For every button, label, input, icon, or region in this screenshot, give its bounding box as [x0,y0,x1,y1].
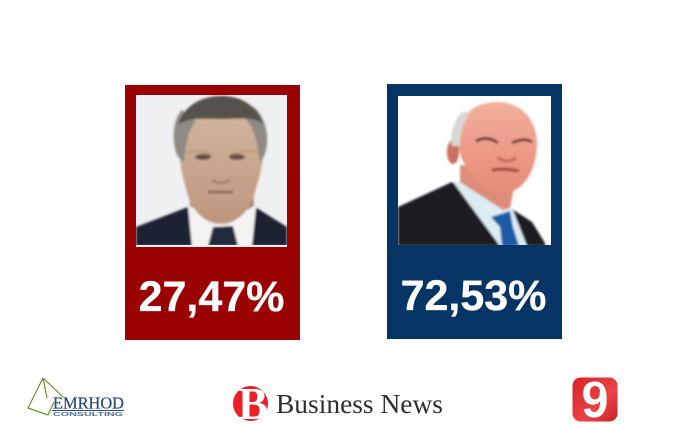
tie [491,211,519,246]
value: 72,53%: 72,53% [401,272,546,320]
portrait: right candidate [398,96,551,246]
portrait: left candidate [136,95,287,246]
panel: left candidate [125,85,300,340]
numeral counter [590,386,600,396]
hair sides [174,106,267,162]
photo underline [136,245,287,247]
face [180,112,263,224]
mouth [208,191,233,193]
wordmark: EMRHOD [53,394,124,412]
nose [212,180,230,183]
wordmark: Business News [276,389,443,419]
head [457,102,537,193]
logo: Emrhod Consulting [28,378,124,418]
suit [398,182,545,246]
nose [498,158,516,161]
panel: right candidate [387,84,562,339]
tie [208,226,238,246]
neck [460,165,517,210]
mouth [492,169,519,171]
eyes [476,138,532,143]
neck [188,197,256,210]
tagline: CONSULTING [53,412,123,418]
logo: channel 9 [572,371,618,425]
ear [447,140,459,164]
side hair [451,112,470,146]
glasses [186,151,258,155]
logo: Business News [233,379,443,425]
value: 27,47%: 27,47% [139,273,284,321]
shirt [188,207,256,246]
eyes [195,154,211,160]
suit [136,207,287,246]
shirt [453,180,527,246]
icon: green pyramid [28,378,63,415]
hair top [178,96,263,125]
